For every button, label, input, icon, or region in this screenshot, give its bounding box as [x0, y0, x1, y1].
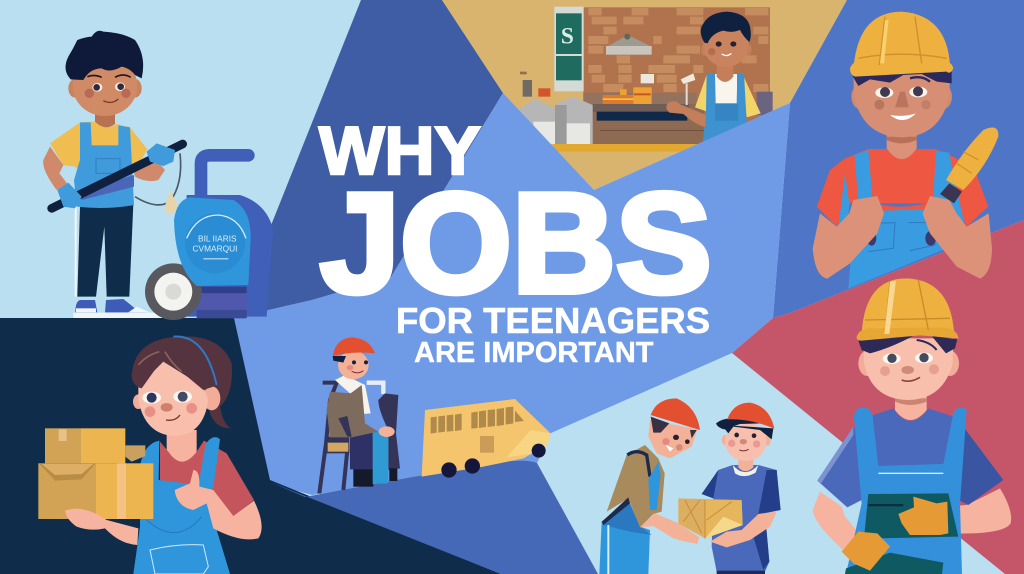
grey building models: [520, 97, 593, 144]
shirt front: [868, 408, 953, 470]
coat: [327, 385, 378, 437]
left hand and forearm: [65, 509, 138, 545]
yellow tool: [940, 127, 998, 203]
head: [333, 351, 369, 379]
arm shadow: [338, 416, 352, 437]
hair back: [132, 336, 232, 428]
hand: [379, 426, 395, 437]
dark chair side: [378, 393, 400, 470]
bus front highlight: [507, 430, 551, 457]
panel: dark blue wedge: [234, 0, 503, 318]
bus windows: [431, 407, 524, 434]
orange helmet: [333, 337, 375, 356]
black wand: [52, 144, 183, 208]
panel: road shape: [270, 461, 598, 574]
red shirt: [817, 149, 988, 227]
panel: navy bottom left: [0, 318, 501, 574]
panel: tan kitchen background: [442, 0, 847, 190]
title block: [317, 113, 712, 368]
kitchen worker: [666, 12, 761, 143]
panel: central mid blue: [234, 93, 790, 495]
bus wheels: [441, 444, 546, 478]
buttons: [867, 231, 936, 246]
straps: [838, 150, 965, 227]
arms and hands: [813, 196, 992, 279]
pressure washer machine: [145, 155, 273, 320]
subheading: are important: ARE IMPORTANT: [414, 336, 654, 368]
neck: [95, 110, 115, 127]
arms: [43, 147, 165, 190]
range hood lamp: [606, 34, 652, 55]
shoes: [75, 299, 150, 312]
cardboard boxes: [38, 428, 153, 519]
subheading: for teenagers: FOR TEENAGERS: [396, 300, 710, 340]
face: [851, 68, 952, 137]
neck: [167, 430, 197, 463]
heading: why: WHY: [319, 113, 481, 189]
orange gloves: [842, 497, 948, 571]
blue tape: [373, 432, 388, 484]
trousers: [350, 432, 373, 469]
heading: jobs: JOBS: [320, 164, 712, 323]
shirt lower: [855, 197, 947, 212]
white scarf: [335, 375, 371, 414]
overalls body: [848, 208, 947, 289]
mixer prop: [681, 73, 695, 105]
counter back: [583, 93, 697, 106]
bus body: [422, 399, 551, 477]
shirt sleeves: [817, 427, 1003, 507]
counter: [553, 104, 704, 152]
hands: [670, 512, 777, 547]
illustration: seated worker with helmet: [319, 337, 400, 493]
hose and nozzle: [135, 153, 181, 213]
overalls: [846, 407, 967, 574]
neck: [887, 132, 917, 159]
neck: [895, 395, 927, 420]
right arm and thumb: [175, 470, 262, 539]
face: [858, 335, 959, 400]
neck shadow: [887, 137, 917, 143]
green banner: [554, 7, 584, 91]
grey-purple bench: [757, 92, 773, 115]
ground strip: [73, 313, 163, 318]
illustration: worker with clipboard bottom right: [813, 278, 1011, 574]
neck shadow: [895, 398, 927, 405]
brick wall: [583, 7, 770, 144]
illustration: girl with boxes: [38, 336, 262, 574]
arms: [813, 488, 1011, 553]
pressure washer machine: BIL IIARIS: [198, 234, 237, 244]
left utensils: [520, 72, 550, 97]
food on counter: [603, 74, 654, 104]
yellow helmet: [857, 278, 959, 341]
illustration: yellow bus: [422, 399, 551, 478]
panel: red wedge: [732, 220, 1024, 574]
bus door: [480, 436, 494, 453]
right worker: [702, 403, 781, 574]
yellow shirt: [50, 122, 147, 170]
green banner: S: [561, 23, 574, 49]
illustration: two workers with parcel: [599, 398, 781, 574]
left worker: [599, 398, 700, 574]
blue apron: [74, 122, 134, 208]
overalls: [133, 437, 230, 574]
panel: kitchen scene: [520, 7, 773, 152]
face: [132, 337, 220, 436]
chair: [319, 383, 349, 493]
head: [65, 31, 143, 116]
blue gloves: [57, 143, 175, 208]
illustration: worker with yellow helmet top right: [813, 12, 998, 289]
parcel: [678, 498, 743, 538]
white sign frame: [367, 383, 383, 394]
pockets: [868, 223, 935, 252]
clipboard: [845, 493, 958, 574]
illustration: boy with pressure washer: [43, 31, 273, 320]
pressure washer machine: CVMARQUI: [193, 244, 237, 254]
yellow helmet: [850, 12, 953, 77]
red shirt: [160, 441, 254, 528]
boots: [353, 468, 397, 487]
legs: [75, 204, 133, 297]
panel: right blue: [773, 0, 1024, 318]
